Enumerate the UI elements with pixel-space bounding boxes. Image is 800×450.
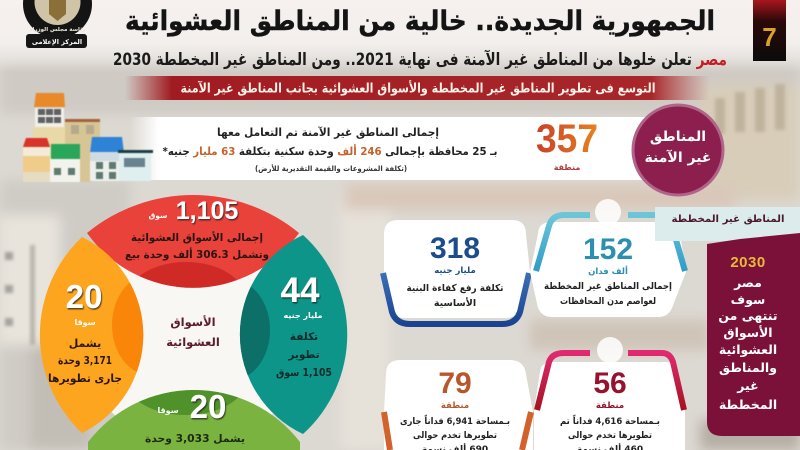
petal: total markets (red): سوق bbox=[149, 211, 167, 220]
logo: media center emblem bbox=[23, 0, 92, 48]
card: 56 areas developed: بـمساحة 4,616 فداناً تم bbox=[560, 414, 660, 427]
circle label: unsafe areas: غير الآمنة bbox=[645, 149, 711, 166]
badge: infographic number 7 bbox=[753, 0, 786, 61]
card: 79 areas under development: تطويرها تخدم حوالى bbox=[413, 431, 497, 441]
petal: development cost (teal): 44 bbox=[281, 271, 320, 310]
card: 79 areas under development: منطقة bbox=[441, 401, 469, 411]
panel: unsafe areas bbox=[130, 105, 723, 195]
card: infrastructure cost 318: تكلفة رفع كفاءة البنية bbox=[406, 283, 504, 294]
petal: development cost (teal): 1,105 سوق bbox=[276, 367, 332, 379]
stat: 357 areas: 357 bbox=[536, 117, 598, 161]
icon: colourful houses bbox=[23, 93, 153, 182]
panel: 2030 goal: الأسواق bbox=[723, 325, 773, 340]
panel: 2030 goal: العشوائية bbox=[719, 342, 777, 357]
stat: 357 areas: منطقة bbox=[554, 163, 580, 172]
petal: total markets (red): 1,105 bbox=[176, 197, 238, 225]
card: 56 areas developed: تطويرها تخدم حوالى bbox=[568, 431, 652, 441]
petal: development cost (teal): تطوير bbox=[287, 349, 320, 361]
ribbon heading: التوسع فى تطوير المناطق غير المخططة والأسواق العشوائية بجانب المناطق غير الآمنة bbox=[180, 80, 656, 96]
card: infrastructure cost 318 bbox=[383, 220, 530, 324]
badge: infographic number 7: 7 bbox=[762, 22, 777, 52]
petal: markets under development (orange): جارى تطويرها bbox=[48, 372, 122, 385]
petal: total markets (red): وتشمل 306.3 ألف وحدة بيع bbox=[125, 247, 269, 261]
chart centre label: العشوائية bbox=[166, 335, 220, 350]
petal: developed markets (green): 20 bbox=[190, 388, 226, 425]
card: unplanned areas 152 bbox=[530, 199, 686, 317]
label: unplanned areas heading: المناطق غير المخططة bbox=[672, 214, 784, 225]
panel text: unsafe areas summary: بـ 25 محافظة بإجمالى 246 ألف وحدة سكنية بتكلفة 63 مليار جنيه* bbox=[162, 144, 498, 158]
petal: total markets (red) bbox=[87, 195, 299, 288]
petal: developed markets (green): يشمل 3,033 وحدة bbox=[145, 433, 245, 445]
card: unplanned areas 152: 152 bbox=[583, 233, 633, 266]
circle label: unsafe areas: المناطق bbox=[650, 129, 706, 145]
petal: total markets (red): إجمالى الأسواق العشوائية bbox=[131, 231, 263, 244]
card: infrastructure cost 318: مليار جنيه bbox=[434, 266, 476, 276]
card: infrastructure cost 318: 318 bbox=[430, 232, 480, 265]
card: 79 areas under development: 79 bbox=[438, 367, 472, 400]
petal: markets under development (orange): 20 bbox=[66, 278, 102, 315]
ribbon heading bbox=[125, 76, 710, 100]
panel: 2030 goal: تنتهى من bbox=[718, 308, 778, 323]
logo tag: المركز الإعلامى bbox=[32, 38, 82, 46]
chart: informal markets circle bbox=[40, 195, 347, 450]
panel: 2030 goal bbox=[707, 233, 800, 436]
petal: markets under development (orange) bbox=[40, 237, 144, 433]
panel: 2030 goal: المخططة bbox=[719, 397, 777, 412]
chart centre label bbox=[166, 315, 220, 350]
circle label: unsafe areas bbox=[633, 105, 723, 195]
panel text: unsafe areas summary: إجمالى المناطق غير الآمنة تم التعامل معها bbox=[217, 126, 439, 139]
card: 56 areas developed: 56 bbox=[593, 367, 627, 400]
card: infrastructure cost 318: الأساسية bbox=[434, 297, 476, 309]
title: الجمهورية الجديدة.. خالية من المناطق العشوائية bbox=[125, 6, 715, 37]
petal: markets under development (orange): 3,171 وحدة bbox=[58, 354, 112, 367]
panel: 2030 goal: والمناطق bbox=[719, 360, 777, 375]
card: unplanned areas 152: لعواصم مدن المحافظات bbox=[560, 296, 656, 307]
label: unplanned areas heading bbox=[655, 207, 800, 241]
card: 79 areas under development: بـمساحة 6,941 فداناً جارى bbox=[400, 414, 510, 427]
petal: developed markets (green) bbox=[88, 390, 300, 450]
panel: 2030 goal: سوف bbox=[731, 292, 765, 307]
card: 79 areas under development bbox=[384, 360, 533, 450]
petal: development cost (teal) bbox=[240, 235, 348, 434]
panel text: unsafe areas summary bbox=[162, 126, 498, 173]
card: unplanned areas 152: ألف فدان bbox=[588, 265, 628, 277]
petal: development cost (teal): تكلفة bbox=[290, 331, 318, 343]
petal: markets under development (orange): سوقا bbox=[74, 318, 96, 327]
panel text: unsafe areas summary: (تكلفة المشروعات والقيمة التقديرية للأرض) bbox=[255, 164, 407, 173]
logo emblem eagle bbox=[49, 0, 66, 21]
card: unplanned areas 152: إجمالى المناطق غير المخططة bbox=[544, 281, 672, 292]
subtitle: مصر تعلن خلوها من المناطق غير الآمنة فى نهاية 2021.. ومن المناطق غير المخططة 2030 bbox=[113, 49, 727, 70]
chart centre label: الأسواق bbox=[170, 315, 216, 330]
petal: markets under development (orange): يشمل bbox=[69, 337, 101, 350]
panel: 2030 goal: مصر bbox=[733, 275, 762, 290]
petal: development cost (teal): مليار جنيه bbox=[283, 311, 323, 320]
panel: 2030 goal: 2030 bbox=[730, 254, 766, 271]
logo agency name: رئاسة مجلس الوزراء bbox=[30, 27, 85, 33]
petal: developed markets (green): سوقا bbox=[157, 406, 179, 415]
panel: 2030 goal: غير bbox=[736, 378, 759, 393]
card: 56 areas developed bbox=[534, 337, 685, 450]
card: 56 areas developed: منطقة bbox=[596, 401, 624, 411]
